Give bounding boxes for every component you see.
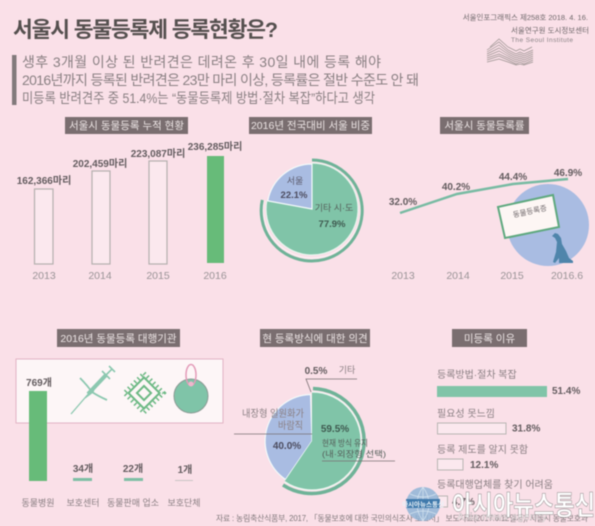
pie: keep current method 59.5 percent xyxy=(283,388,364,493)
reason 3 xyxy=(437,444,528,471)
icon: pet tag xyxy=(174,364,208,413)
data labels xyxy=(389,168,582,208)
watermark: Asia News Agency: Asia news agency xyxy=(457,511,548,523)
year axis: 2015 xyxy=(500,270,524,282)
heading xyxy=(440,117,529,134)
callout: other 0.5 percent: 0.5% xyxy=(305,366,328,377)
callout: internal chip label: 내장형 일원화가 xyxy=(242,408,304,420)
icon: globe emblem xyxy=(402,487,444,521)
pie: other regions 77.9 percent: 기타 시·도 xyxy=(315,203,353,213)
pie: Seoul 22.1 percent: 서울 xyxy=(287,176,303,186)
pie: other regions 77.9 percent xyxy=(261,160,362,261)
icon: syringe xyxy=(71,366,115,414)
reason 1: 51.4% xyxy=(552,386,580,397)
bar: animal hospital: 769개 xyxy=(26,376,52,389)
year axis: 2013 xyxy=(391,270,415,282)
data labels: 40.2% xyxy=(442,182,470,193)
reason 2: 31.8% xyxy=(512,424,540,434)
heading xyxy=(452,329,527,347)
heading: 현 등록방식에 대한 의견 xyxy=(262,333,368,345)
bar 2013: 162,366마리 xyxy=(17,174,71,187)
bar 2016: 236,285마리 xyxy=(188,140,242,153)
bar: shelter: 보호센터 xyxy=(66,498,100,508)
bar: shelter xyxy=(66,462,100,508)
source note: 자료 : 농림축산식품부, 2017, 「동물보호에 대한 국민의식조사 보고서」 보도자료(2017.6.12일자); 서울시 동물보호과 xyxy=(216,513,588,523)
reason 4: 등록대행업체를 찾기 어려움 xyxy=(437,478,553,491)
pie: internal chip preferred 40 percent xyxy=(265,394,312,480)
reason 2 xyxy=(437,408,540,434)
year axis xyxy=(391,270,583,282)
bar: protection groups: 보호단체 xyxy=(167,498,201,508)
callout: other 0.5 percent: 기타 xyxy=(339,365,356,375)
panel: opinion pie chart xyxy=(234,329,395,493)
publication info and logo: The Seoul Institute xyxy=(511,37,573,44)
callout: internal chip label: 바람직 xyxy=(278,419,303,432)
pie: other regions 77.9 percent: 77.9% xyxy=(319,219,346,230)
icon card xyxy=(16,359,223,423)
callout: current method label: 59.5% xyxy=(321,424,349,435)
summary text block: 생후 3개월 이상 된 반려견은 데려온 후 30일 내에 등록 해야 xyxy=(22,54,381,70)
heading: 2016년 전국대비 서울 비중 xyxy=(251,120,370,132)
panel: registration agencies xyxy=(16,329,223,508)
callout: current method label: (내·외장형 선택) xyxy=(322,449,386,459)
heading xyxy=(57,329,180,347)
icon: Seoul Institute mountain logo xyxy=(487,39,533,65)
reason 3: 등록 제도를 알지 못함 xyxy=(437,444,528,456)
reason 4 xyxy=(437,478,553,508)
bar 2016 xyxy=(188,140,242,282)
bar 2015 xyxy=(131,147,185,282)
watermark: Asia News Agency xyxy=(402,487,595,523)
callout: current method label: 현재 방식 유지 xyxy=(322,438,368,448)
data labels: 46.9% xyxy=(554,168,582,179)
panel: cumulative registrations bar chart xyxy=(17,117,242,282)
bar 2013 xyxy=(17,174,71,282)
year axis: 2016.6 xyxy=(551,270,583,282)
heading xyxy=(249,117,372,134)
pie: Seoul 22.1 percent: 22.1% xyxy=(281,190,308,201)
bar 2015: 2015 xyxy=(146,270,170,282)
heading: 미등록 이유 xyxy=(464,333,515,345)
reason 4: 4.7% xyxy=(452,497,475,508)
publication info and logo: 서울인포그래픽스 제258호 2018. 4. 16. xyxy=(463,12,588,22)
icon: sitting dog xyxy=(552,233,573,263)
bar: shelter: 34개 xyxy=(73,462,93,475)
reason 2: 필요성 못느낌 xyxy=(437,408,495,420)
publication info and logo xyxy=(463,12,589,65)
title: 서울시 동물등록제 등록현황은? xyxy=(13,18,278,42)
bar 2014 xyxy=(73,157,127,282)
data labels: 32.0% xyxy=(389,197,417,208)
bar: protection groups xyxy=(167,463,201,508)
registration card: 동물등록증 xyxy=(512,204,548,219)
data labels: 44.4% xyxy=(499,172,527,183)
publication info and logo: 서울연구원 도시정보센터 xyxy=(511,25,589,35)
callout: internal chip label: 40.0% xyxy=(273,441,301,452)
reason 3: 12.1% xyxy=(470,460,498,471)
heading xyxy=(260,329,370,347)
icon: microchip xyxy=(124,373,164,413)
heading: 서울시 동물등록 누적 현황 xyxy=(69,120,184,132)
bar 2014: 2014 xyxy=(88,270,112,282)
bar: pet shops xyxy=(107,462,159,508)
bar: pet shops: 22개 xyxy=(123,462,143,475)
bar 2015: 223,087마리 xyxy=(131,147,185,160)
summary text block: 2016년까지 등록된 반려견은 23만 마리 이상, 등록률은 절반 수준도 안 돼 xyxy=(22,72,419,88)
bar 2016: 2016 xyxy=(203,270,227,282)
reason 1 xyxy=(437,368,580,397)
callout: other 0.5 percent xyxy=(305,365,357,392)
bar 2014: 202,459마리 xyxy=(73,157,127,170)
heading: 서울시 동물등록률 xyxy=(444,120,525,132)
trend line xyxy=(400,179,568,213)
panel: reasons for non-registration xyxy=(437,329,580,508)
reason 1: 등록방법·절차 복잡 xyxy=(437,368,517,381)
panel: Seoul share pie chart xyxy=(249,117,372,261)
panel: registration rate line chart xyxy=(389,117,589,282)
heading xyxy=(65,117,188,134)
bar: protection groups: 1개 xyxy=(178,463,192,476)
summary text block: 미등록 반려견주 중 51.4%는 “동물등록제 방법·절차 복잡”하다고 생각 xyxy=(22,90,375,106)
bar: pet shops: 동물판매 업소 xyxy=(107,498,159,508)
callout: current method label xyxy=(321,424,395,461)
callout: internal chip label xyxy=(234,408,312,452)
summary text block xyxy=(12,54,419,106)
bar 2013: 2013 xyxy=(32,270,56,282)
bar: animal hospital: 동물병원 xyxy=(21,498,55,508)
heading: 2016년 동물등록 대행기관 xyxy=(60,333,177,345)
illustration: blue circle with dog and card xyxy=(498,184,589,266)
icon: globe emblem: 아시아뉴스통신 xyxy=(402,500,444,508)
pie: Seoul 22.1 percent xyxy=(268,164,312,209)
bar: animal hospital xyxy=(21,376,55,508)
year axis: 2014 xyxy=(446,270,470,282)
